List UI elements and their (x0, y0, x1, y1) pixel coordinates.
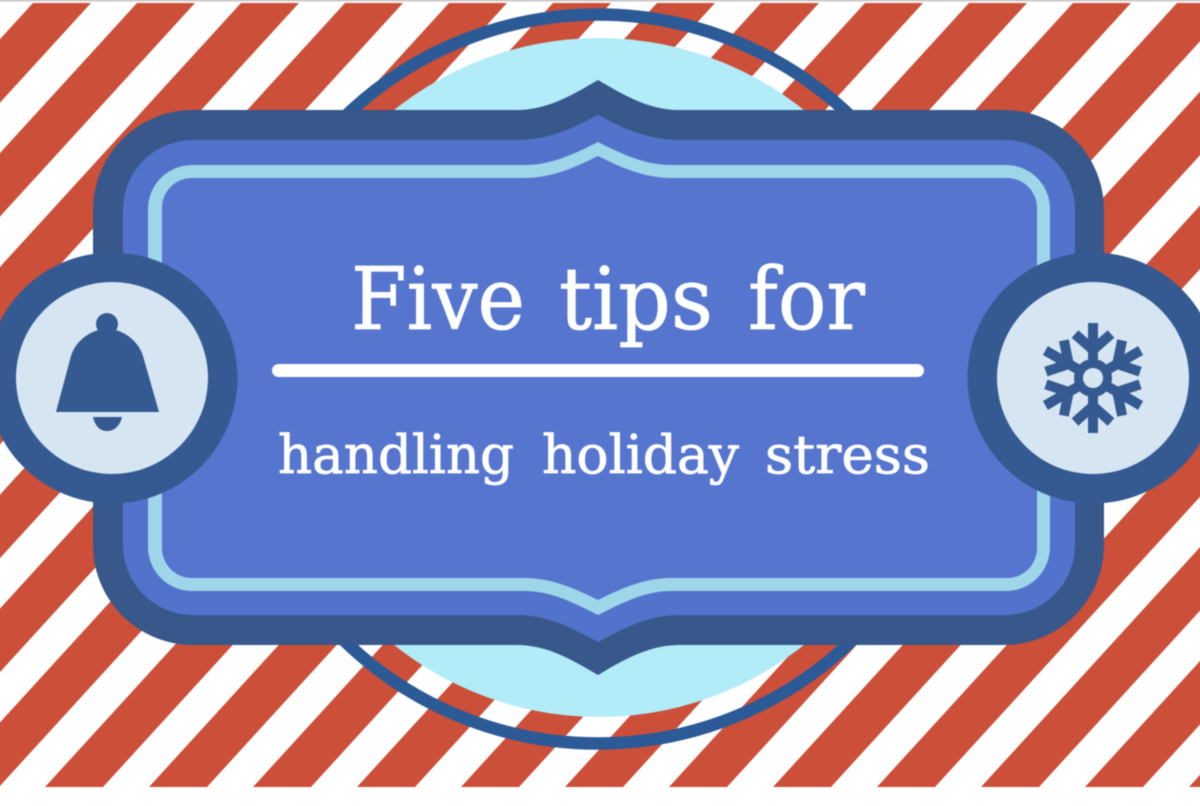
badge light blue inset border (148, 142, 1050, 615)
icon: bell (56, 313, 159, 431)
title: Five tips for (351, 250, 866, 350)
subtitle: handling holiday stress: holiday (542, 425, 739, 486)
dark blue outer ring (234, 14, 962, 744)
subtitle: handling holiday stress: handling (278, 425, 514, 486)
badge: ornate title plaque (93, 80, 1104, 675)
badge middle blue panel (123, 115, 1075, 642)
right medallion with snowflake icon (968, 252, 1200, 504)
title: Five tips for: Five (351, 250, 525, 350)
subtitle: handling holiday stress: stress (765, 425, 930, 486)
left medallion with bell icon (0, 252, 238, 504)
divider line (272, 364, 924, 377)
title: Five tips for: for (748, 250, 866, 350)
light cyan backing circle (266, 38, 932, 717)
title: Five tips for: tips (559, 250, 713, 350)
subtitle: handling holiday stress (278, 425, 930, 486)
badge outer dark frame (93, 80, 1104, 675)
badge inner blue panel (162, 156, 1037, 600)
icon: snowflake (1036, 323, 1150, 433)
